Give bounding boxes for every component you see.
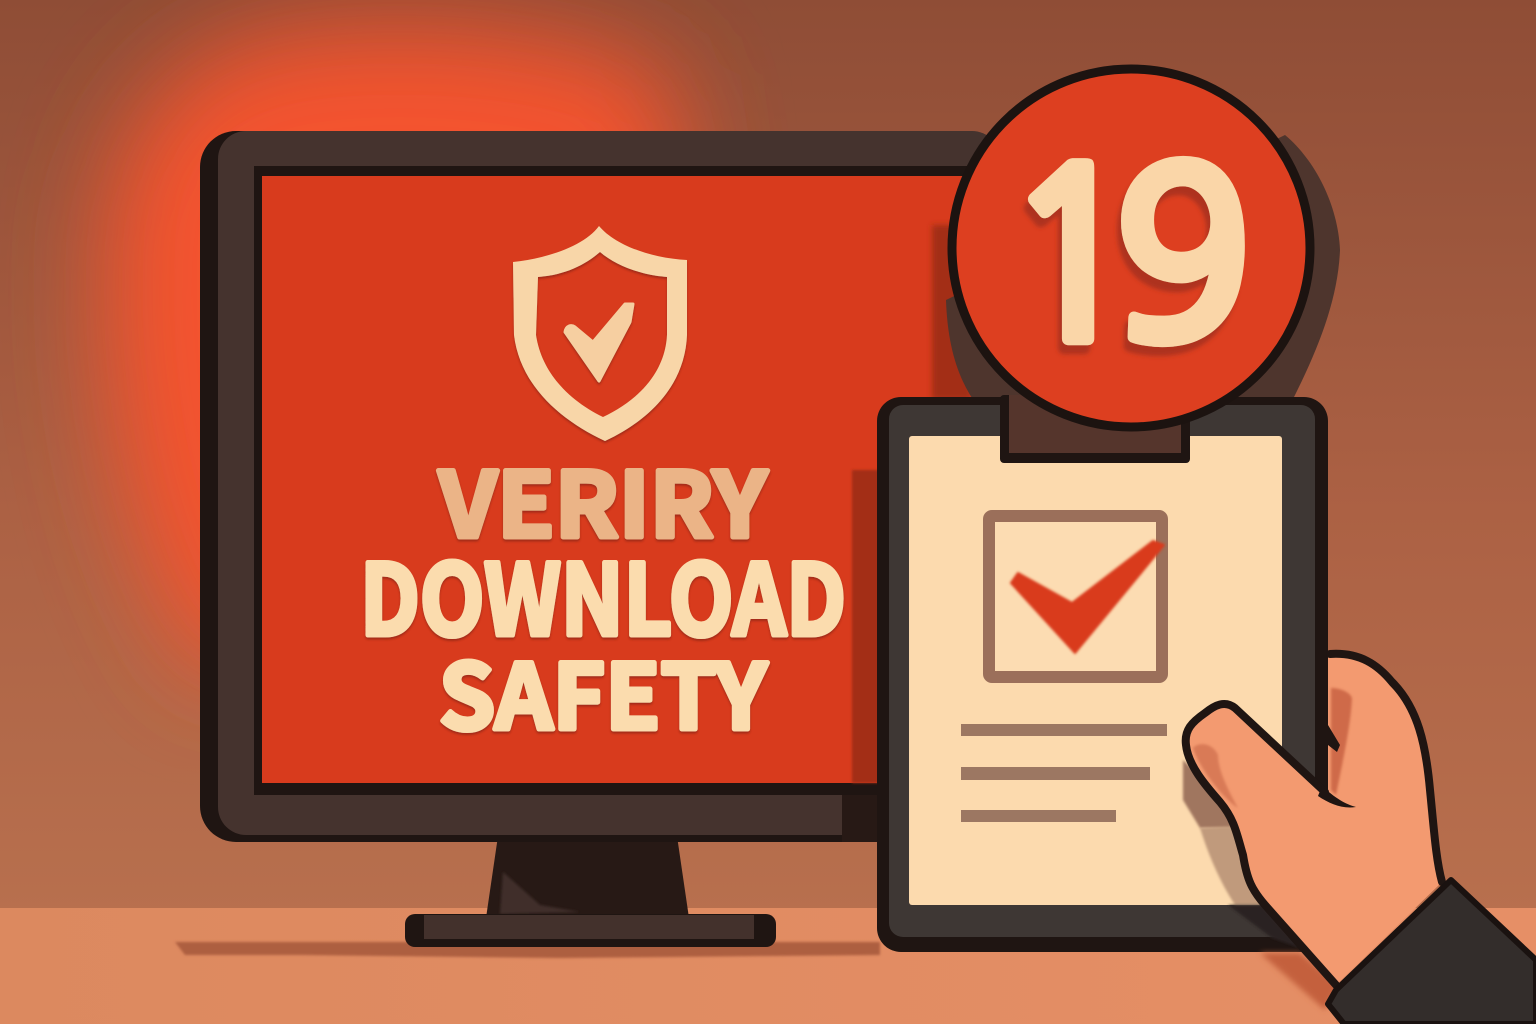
shield check — [565, 304, 633, 381]
badge circle — [952, 69, 1310, 427]
hand holding clipboard — [1183, 654, 1536, 1024]
palm shade — [1331, 688, 1352, 795]
badge number: 1 — [1001, 143, 1145, 377]
hand shadow on paper — [1183, 760, 1300, 948]
hand — [1186, 654, 1442, 985]
clipboard — [877, 395, 1328, 952]
icon: checkbox with red tick — [989, 516, 1164, 677]
heading: screen text — [360, 433, 846, 755]
sleeve — [1328, 880, 1536, 1024]
thumb crease — [1318, 786, 1356, 807]
monitor stand — [405, 836, 776, 947]
clipboard paper — [909, 436, 1282, 905]
monitor — [200, 131, 1000, 947]
monitor screen — [254, 166, 984, 842]
shield outline — [513, 226, 687, 441]
heading line: VERIRY: VERIRY — [438, 433, 768, 563]
clipboard clip — [1000, 395, 1190, 463]
clipboard frame — [877, 397, 1328, 952]
text lines — [961, 724, 1167, 822]
hand shadow on desk — [1260, 953, 1340, 1010]
hand outline — [1186, 654, 1442, 985]
clipboard side notch — [1328, 725, 1340, 752]
monitor frame — [200, 131, 1000, 842]
desk surface — [0, 908, 1536, 1024]
heading line: DOWNLOAD: DOWNLOAD — [360, 522, 846, 664]
badge shadow — [946, 135, 1340, 430]
badge: 19 — [952, 69, 1310, 427]
thumb shade — [1193, 744, 1238, 808]
badge number — [1001, 143, 1255, 377]
heading line: SAFETY: SAFETY — [439, 625, 768, 755]
badge number: 9 — [1111, 143, 1255, 377]
icon: shield with check — [513, 226, 687, 441]
